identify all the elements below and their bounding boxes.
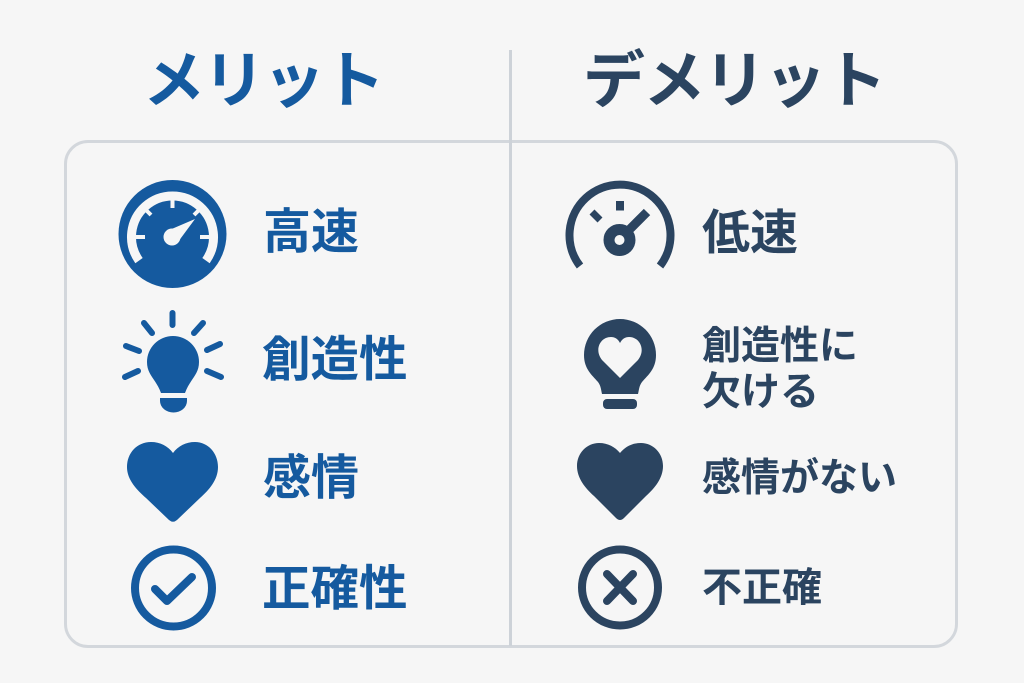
label: fast: 高速	[263, 206, 359, 259]
icon: bulb with heart	[584, 319, 656, 409]
label: inaccurate: 不正確	[702, 566, 822, 610]
label: slow: 低速	[702, 207, 798, 260]
icon: fast gauge	[118, 180, 226, 288]
icon: slow gauge	[566, 180, 674, 268]
icon: check circle	[131, 546, 216, 630]
icon: bulb with rays	[122, 310, 224, 412]
label: creativity: 創造性	[262, 333, 408, 387]
icon: heart	[127, 442, 218, 522]
label: lacks creativity: 欠ける	[702, 371, 819, 414]
label: lacks creativity: 創造性に	[702, 325, 858, 368]
label: emotion: 感情	[263, 452, 359, 505]
heading: demerit: デメリット	[583, 47, 885, 116]
icon: x circle	[578, 546, 662, 630]
heading: merit: メリット	[143, 47, 383, 116]
label: accuracy: 正確性	[262, 562, 408, 616]
center divider	[509, 50, 512, 646]
icon: dark heart	[577, 443, 663, 520]
panel frame	[64, 140, 958, 648]
label: lacks creativity	[702, 325, 858, 414]
label: no emotion: 感情がない	[702, 457, 897, 500]
